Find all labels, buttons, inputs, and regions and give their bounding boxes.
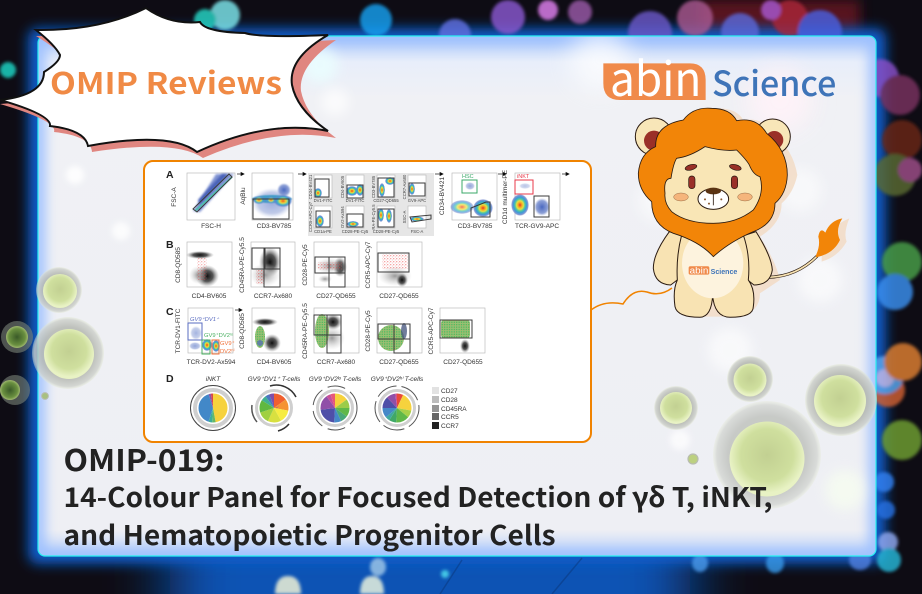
pie legend [432, 387, 467, 430]
plot CD28 vs CD27: CD28-PE-Cy5 [302, 244, 309, 286]
plot HSC: CD3-BV785 [458, 223, 493, 230]
plot CD8 vs CD4: CD4-BV605 [192, 293, 227, 300]
plot CD45RA vs CCR7: CCR7-Ax680 [254, 293, 293, 300]
burst shape [0, 8, 328, 152]
plot CD8 vs CD4, gated: CD8-QD585 [239, 313, 246, 349]
plot CD45RA vs CCR7 [239, 237, 295, 300]
eight lineage sub-plots: CD1a-PE [314, 229, 332, 234]
eight lineage sub-plots: CD28-PE-Cy5 [342, 229, 369, 234]
label D: D [166, 373, 174, 385]
plot HSC: CD34-BV421 [439, 176, 446, 215]
eight lineage sub-plots: CD27-QD655 [373, 198, 399, 203]
plot iNKT [502, 169, 560, 230]
plot TCR-DV1 vs TCR-DV2: GV9⁺ [220, 340, 235, 347]
logo: abin Science: Science [712, 56, 836, 106]
face [665, 147, 761, 223]
eight lineage sub-plots: SSC-A [402, 210, 407, 223]
plot CD45RA vs CCR7, gated: CD45RA-PE-Cy5.5 [302, 303, 309, 359]
eight lineage sub-plots: CD34-BV421 [308, 174, 313, 199]
subtitle [64, 476, 772, 553]
plot CD8 vs CD4, gated [239, 308, 295, 366]
plot iNKT: iNKT [517, 174, 530, 180]
pie legend: CCR5 [441, 414, 459, 421]
pie iNKT [190, 376, 236, 430]
chart figure panel [144, 161, 591, 442]
pie GV9 DV2 low [309, 376, 362, 430]
pie GV9 DV1 [248, 376, 301, 431]
pie GV9 DV2 high [371, 376, 424, 430]
eight lineage sub-plots: GV9-APC [408, 198, 426, 203]
plot CD28 vs CD27, gated: CD28-PE-Cy5 [365, 310, 372, 352]
row C [166, 303, 485, 366]
plot CD28 vs CD27, gated [365, 308, 422, 366]
tail [768, 218, 842, 277]
plot CCR5 vs CD27, gated: CD27-QD655 [443, 359, 483, 366]
plot TCR-DV1 vs TCR-DV2: GV9⁺DV1⁺ [190, 317, 220, 323]
row D: pies [166, 373, 467, 431]
chart contents [166, 169, 569, 431]
belly logo: abin [690, 266, 708, 276]
plot CCR5 vs CD27: CD27-QD655 [379, 293, 419, 300]
plot CD45RA vs CCR7, gated [302, 303, 359, 366]
pie legend: CD27 [441, 388, 458, 395]
plot AqBlu: CD3-BV785 [257, 223, 292, 230]
plot TCR-DV1 vs TCR-DV2 [175, 308, 236, 366]
eight lineage sub-plots: CCR7-Ax680 [402, 174, 407, 199]
plot TCR-DV1 vs TCR-DV2: DV2ʰⁱ [220, 347, 235, 355]
badge text: OMIP Reviews [50, 59, 282, 103]
plot CD28 vs CD27, gated: CD27-QD655 [379, 359, 419, 366]
plot CCR5 vs CD27, gated: CCR5-APC-Cy7 [428, 307, 435, 354]
label A: A [166, 169, 174, 181]
eight lineage sub-plots: CD4-BV605 [340, 175, 345, 198]
pie iNKT: iNKT [206, 376, 221, 383]
plot CD8 vs CD4, gated: CD4-BV605 [257, 359, 292, 366]
label C: C [166, 306, 174, 318]
eight lineage sub-plots [308, 174, 431, 234]
mascot soft shadow [683, 108, 849, 317]
plot CD45RA vs CCR7: CD45RA-PE-Cy5.5 [239, 237, 246, 293]
plot FSC [171, 173, 235, 230]
plot HSC: HSC [462, 174, 474, 180]
eight lineage sub-plots: DV1-FITC [314, 198, 332, 203]
pie GV9 DV1: GV9⁺DV1⁺ T-cells [248, 376, 301, 383]
plot TCR-DV1 vs TCR-DV2: TCR-DV1-FITC [175, 308, 182, 353]
pie GV9 DV2 high: GV9⁺DV2ʰⁱ T-cells [371, 376, 424, 383]
label B: B [166, 239, 174, 251]
pie GV9 DV2 low: GV9⁺DV2ˡᵒ T-cells [309, 376, 362, 383]
plot CD8 vs CD4 [175, 242, 232, 300]
lion mascot [635, 108, 849, 317]
row B [166, 237, 422, 300]
logo: abin Science [603, 41, 836, 110]
eight lineage sub-plots: CD28-PE-Cy5 [373, 229, 400, 234]
mane [638, 108, 787, 257]
plot CD28 vs CD27 [302, 242, 359, 300]
belly logo: Science [711, 267, 737, 276]
plot CD28 vs CD27: CD27-QD655 [316, 293, 356, 300]
main heading: OMIP-019: [64, 436, 224, 480]
plot iNKT: CD1d multimer-PE [502, 169, 509, 224]
ears [635, 118, 790, 155]
burst badge [0, 8, 336, 158]
grey backdrop [308, 173, 434, 236]
plot CCR5 vs CD27 [365, 241, 422, 300]
subtitle: and Hematopoietic Progenitor Cells [64, 514, 556, 553]
logo: abin Science: abin [610, 41, 701, 110]
plot FSC: FSC-H [201, 223, 221, 230]
plot AqBlu: AqBlu [240, 187, 247, 205]
plot TCR-DV1 vs TCR-DV2: GV9⁺DV2ˡᵒ [204, 332, 234, 339]
gating arrow [235, 308, 242, 312]
pie legend: CD28 [441, 397, 458, 404]
pie legend: CCR7 [441, 423, 459, 430]
plot HSC [439, 173, 497, 230]
belly [682, 228, 743, 298]
plot AqBlu [240, 173, 293, 230]
cells: left cluster [0, 267, 104, 405]
plot FSC: FSC-A [171, 187, 178, 207]
eight lineage sub-plots: CCR5-APC-Cy7 [308, 201, 313, 232]
muzzle and nose [698, 188, 729, 209]
connector line [591, 288, 672, 310]
cells: right cluster [654, 356, 877, 509]
eight lineage sub-plots: CD3-BV785 [371, 175, 376, 198]
plot CCR5 vs CD27, gated [428, 307, 485, 366]
pie legend: CD45RA [441, 406, 467, 413]
gating arrows [237, 172, 569, 176]
plot iNKT: TCR-GV9-APC [515, 223, 559, 230]
belly logo [689, 266, 737, 276]
plot TCR-DV1 vs TCR-DV2: TCR-DV2-Ax594 [187, 359, 236, 366]
burst shadow [0, 14, 336, 158]
eight lineage sub-plots: RA-PE-Cy5.5 [371, 204, 376, 230]
eight lineage sub-plots: DV2-Ax594 [340, 206, 345, 228]
body [653, 232, 772, 317]
plot CD45RA vs CCR7, gated: CCR7-Ax680 [317, 359, 356, 366]
plot CD8 vs CD4: CD8-QD585 [175, 247, 182, 283]
title block [64, 436, 772, 553]
plot CCR5 vs CD27: CCR5-APC-Cy7 [365, 241, 372, 288]
eight lineage sub-plots: FSC-A [411, 229, 423, 234]
eight lineage sub-plots: DV1-FITC [346, 198, 364, 203]
brows, eyes and cheeks [674, 163, 752, 201]
subtitle: 14-Colour Panel for Focused Detection of γδ T, iNKT, [64, 476, 772, 515]
row A [166, 169, 569, 236]
